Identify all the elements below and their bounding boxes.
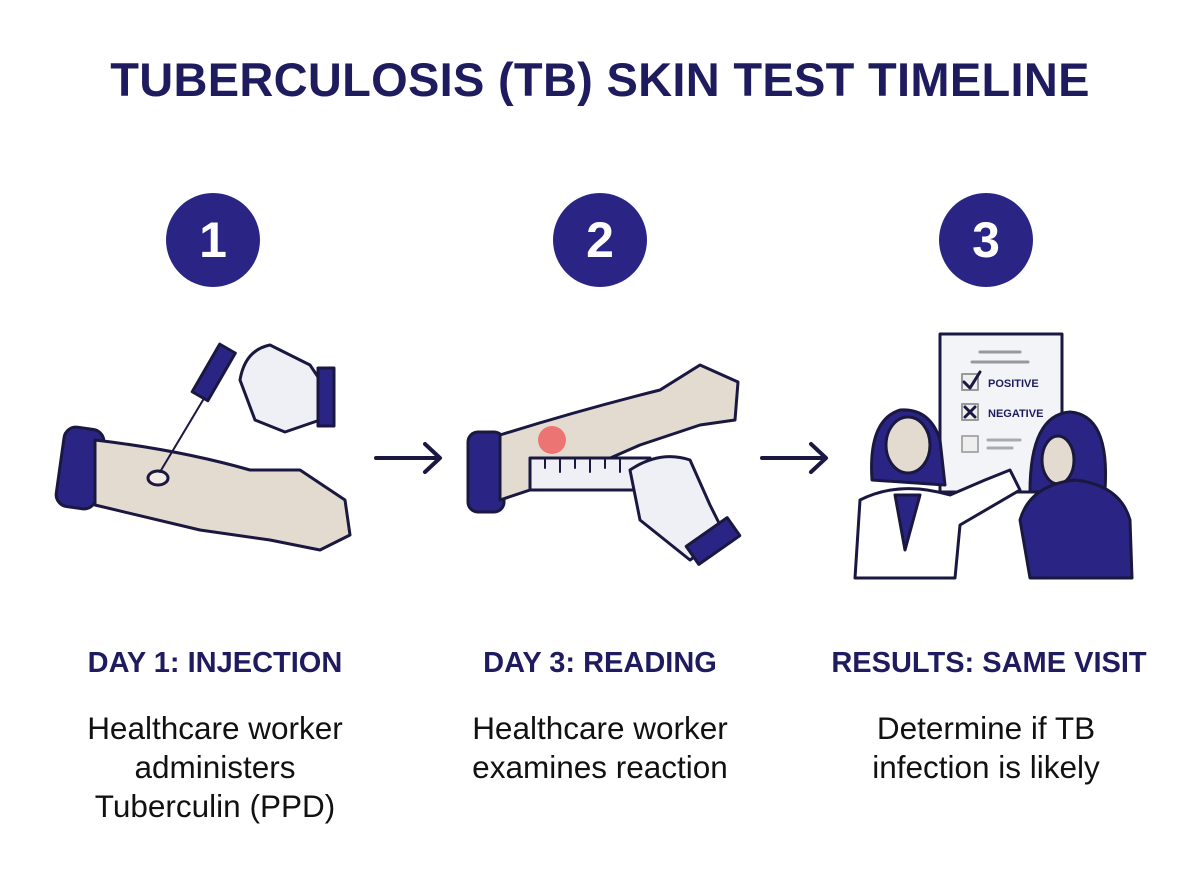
step 2 number	[553, 193, 647, 287]
step 1 text	[87, 710, 343, 824]
step 3 text: Determine if TB	[877, 710, 1095, 746]
step 2 number: 2	[586, 212, 614, 268]
step 1 text: Healthcare worker	[87, 710, 343, 746]
step 3 heading: RESULTS: SAME VISIT	[831, 647, 1147, 679]
step 1 text: Tuberculin (PPD)	[95, 788, 335, 824]
step 2 text: examines reaction	[472, 749, 728, 785]
step 1 text: administers	[134, 749, 296, 785]
arrow 1	[376, 444, 440, 472]
step 2 text: Healthcare worker	[472, 710, 728, 746]
step 3 text: infection is likely	[872, 749, 1100, 785]
step 1 number	[166, 193, 260, 287]
icon: results consultation: NEGATIVE	[988, 408, 1043, 420]
title: TUBERCULOSIS (TB) SKIN TEST TIMELINE	[110, 53, 1090, 106]
step 2 text	[472, 710, 728, 785]
icon: results consultation	[855, 334, 1132, 578]
step 2 heading: DAY 3: READING	[483, 647, 717, 679]
step 3 number	[939, 193, 1033, 287]
step 3 text	[872, 710, 1100, 785]
step 3 number: 3	[972, 212, 1000, 268]
icon: reading arm with ruler	[468, 365, 740, 564]
step 1 heading: DAY 1: INJECTION	[88, 647, 342, 679]
icon: results consultation: POSITIVE	[988, 378, 1039, 390]
icon: injection arm	[55, 344, 350, 550]
arrow 2	[762, 444, 826, 472]
step 1 number: 1	[199, 212, 227, 268]
illustrations	[54, 332, 1134, 580]
